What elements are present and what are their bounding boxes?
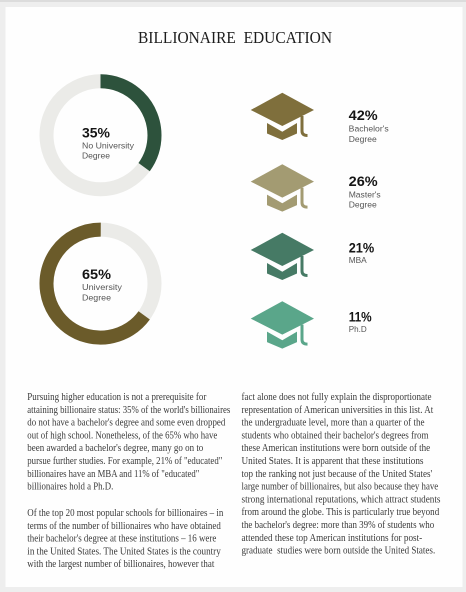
donut chart: no university degree [46,81,154,189]
stat: 26% master's degree [349,174,381,210]
icon: graduation cap, PhD [251,301,314,349]
text block: right column: these American institutions were born outside of the [242,443,431,454]
icon: graduation cap, MBA [251,233,314,280]
donut chart: university degree: Degree [82,293,111,303]
text block: left column: out of high school. Nonetheless, of the 65% who have [27,430,218,441]
donut chart: university degree: 65% [82,267,111,282]
text block: right column: attended these top American institutions for post- [242,533,422,544]
text block: right column: from around the globe. This is particularly true beyond [242,507,439,518]
text block: right column: the undergraduate level, more than a quarter of the [242,418,425,429]
text block: right column: students who obtained their bachelor's degrees from [242,430,429,441]
stat: 11% PhD [349,310,372,334]
text block: left column: Pursuing higher education is not a prerequisite for [27,392,207,403]
stat: 26% master's degree: Master's [349,189,381,199]
text block: left column: Of the top 20 most popular schools for billionaires – in [27,508,223,519]
stat: 42% bachelor's degree: Degree [349,134,377,144]
text block: right column: United States. It is apparent that these institutions [242,456,424,467]
stat: 11% PhD: 11% [349,310,372,325]
text block: left column: been awarded a bachelor's degree, many go on to [27,443,203,454]
stat: 26% master's degree: Degree [349,200,377,210]
text block: left column: terms of the number of billionaires who have obtained [27,521,221,532]
text block: right column: top the ranking not just because of the United States' [242,469,432,480]
icon: graduation cap, master's [251,164,314,212]
donut chart: no university degree: 35% [82,126,110,141]
stat: 11% PhD: Ph.D [349,324,367,334]
title: BILLIONAIRE EDUCATION [138,28,332,47]
text block: right column: large number of billionaires, but also because they have [242,482,439,493]
stat: 42% bachelor's degree: 42% [349,108,378,123]
donut chart: university degree [25,208,176,359]
text block: right column: fact alone does not fully explain the disproportionate [242,392,432,403]
stat: 42% bachelor's degree [349,108,389,144]
text block: right column: strong international reputations, which attract students [242,494,441,505]
stat: 21% MBA [349,240,374,265]
donut chart: university degree: University [82,282,123,292]
text block: left column: their bachelor's degree at these institutions – 16 were [27,534,217,545]
donut chart: no university degree: Degree [82,151,110,161]
stat: 42% bachelor's degree: Bachelor's [349,124,389,134]
text block: left column: attaining billionaire status: 35% of the world's billionaires [27,405,230,416]
text block: left column: in the United States. The United States is the country [27,546,221,557]
text block: left column: pursue further studies. For example, 21% of "educated" [27,456,222,467]
text block: left column [27,392,230,570]
text block: left column: billionaires have an MBA and 11% of "educated" [27,469,199,480]
icon: graduation cap, bachelor's [251,93,314,140]
text block: right column: the bachelor's degree: more than 39% of students who [242,520,434,531]
donut chart: no university degree: No University [82,140,135,150]
text block: right column: representation of American universities in this list. At [242,405,433,416]
text block: right column [242,392,441,557]
stat: 26% master's degree: 26% [349,174,378,189]
stat: 21% MBA: MBA [349,255,367,265]
stat: 21% MBA: 21% [349,240,374,255]
text block: left column: with the largest number of billionaires, however that [27,559,214,570]
text block: left column: do not have a bachelor's degree and some even dropped [27,418,225,429]
text block: left column: billionaires hold a Ph.D. [27,482,113,493]
text block: right column: graduate studies were born outside the United States. [242,546,435,557]
